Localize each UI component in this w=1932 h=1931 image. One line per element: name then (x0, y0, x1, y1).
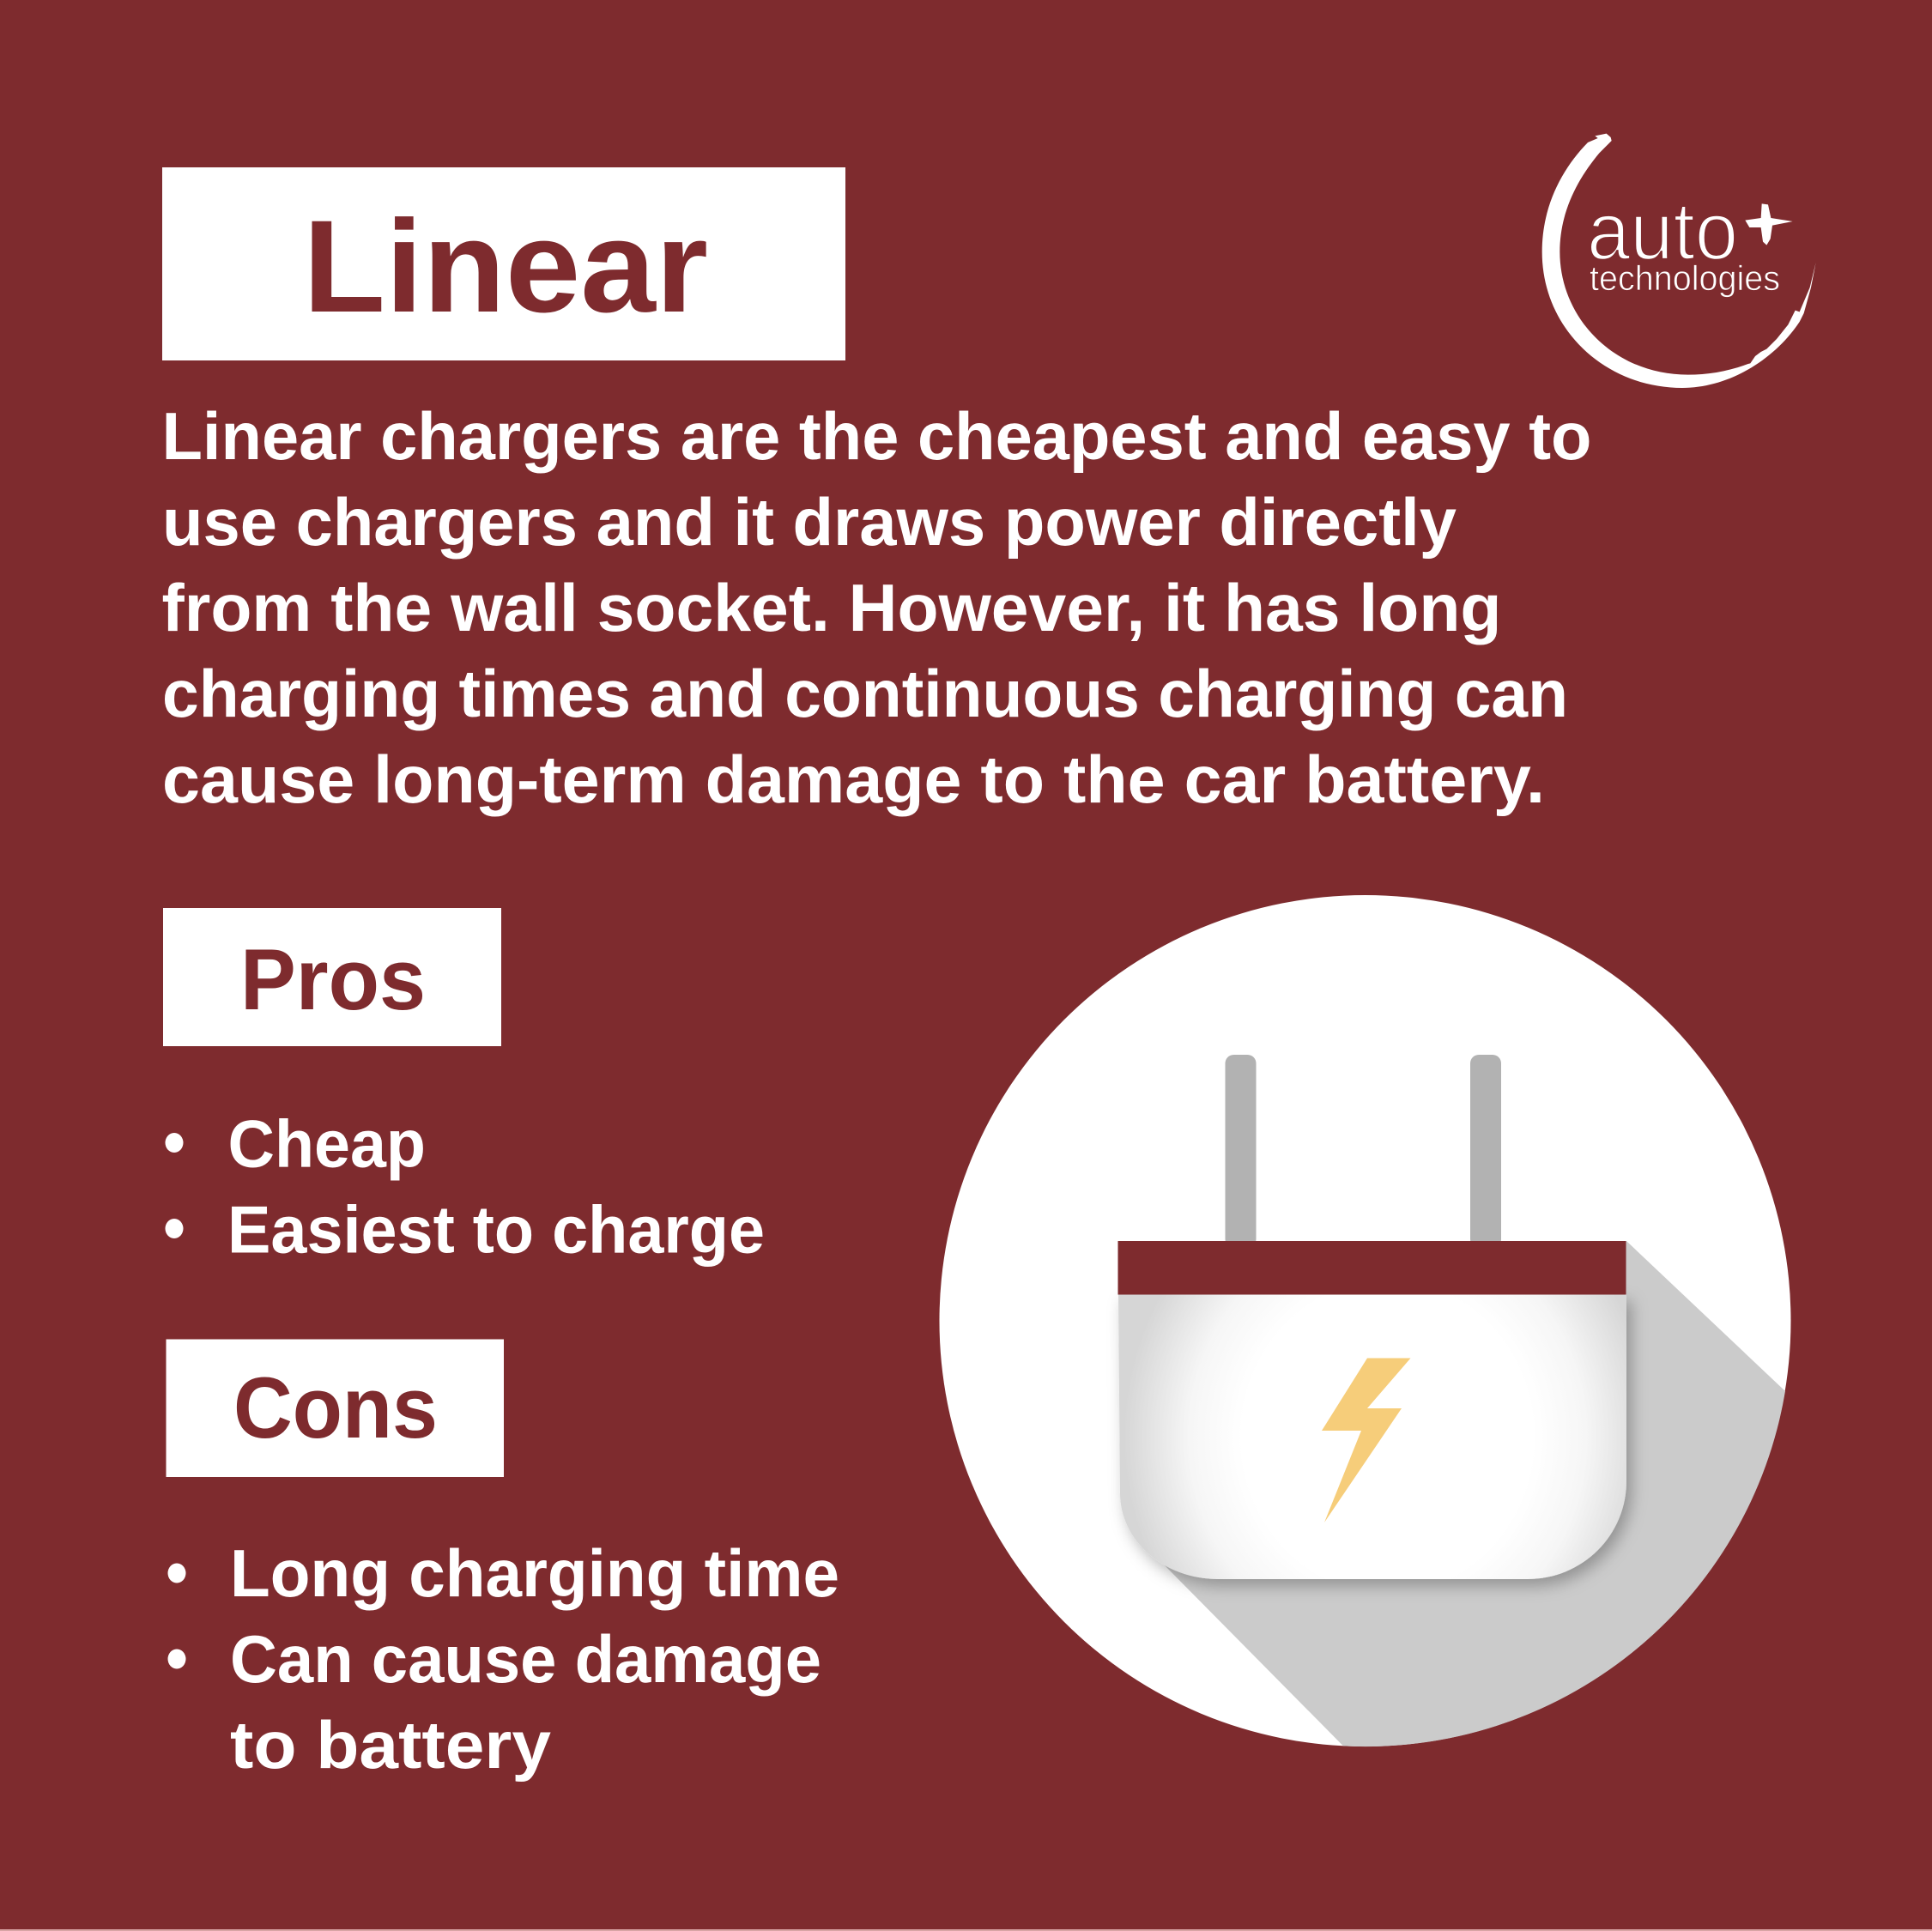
left prong (1226, 1055, 1257, 1248)
description paragraph: Linear chargers are the cheapest and easy to (161, 398, 1591, 474)
description paragraph: cause long-term damage to the car battery. (162, 742, 1545, 817)
heading: Pros: Pros (240, 932, 426, 1028)
list: pros (165, 1105, 765, 1267)
title: Linear: Linear (303, 193, 708, 340)
long shadow (1161, 1241, 1785, 1746)
logo word: technologies: technologies (1590, 258, 1780, 298)
logo: auto+ technologies (1542, 134, 1816, 388)
logo word: auto: auto (1587, 185, 1738, 277)
logo plus sign (1745, 203, 1793, 245)
white circle (939, 895, 1790, 1746)
title: Linear (162, 167, 845, 360)
list: cons (168, 1535, 839, 1783)
con item: Can cause damage to battery: Can cause damage (230, 1621, 821, 1697)
pro item: Cheap: Cheap (228, 1105, 426, 1181)
heading: Pros (163, 908, 501, 1046)
charger top band (1117, 1241, 1626, 1294)
illustration: wall charger in white circle (939, 895, 1790, 1746)
heading: Cons: Cons (233, 1360, 438, 1456)
heading: Cons (167, 1339, 504, 1477)
description paragraph: charging times and continuous charging can (162, 656, 1568, 731)
icon: lightning bolt (1322, 1358, 1411, 1522)
right prong (1470, 1055, 1501, 1248)
con item: Long charging time: Long charging time (230, 1535, 839, 1611)
description paragraph: use chargers and it draws power directly (162, 484, 1457, 560)
charger body (1118, 1294, 1626, 1579)
pro item: Easiest to charge: Easiest to charge (227, 1191, 765, 1267)
logo brush circle (1542, 134, 1816, 388)
description paragraph (161, 398, 1591, 817)
con item: Can cause damage to battery (168, 1621, 821, 1783)
description paragraph: from the wall socket. However, it has long (161, 570, 1502, 645)
con item: Can cause damage to battery: to battery (230, 1707, 551, 1783)
